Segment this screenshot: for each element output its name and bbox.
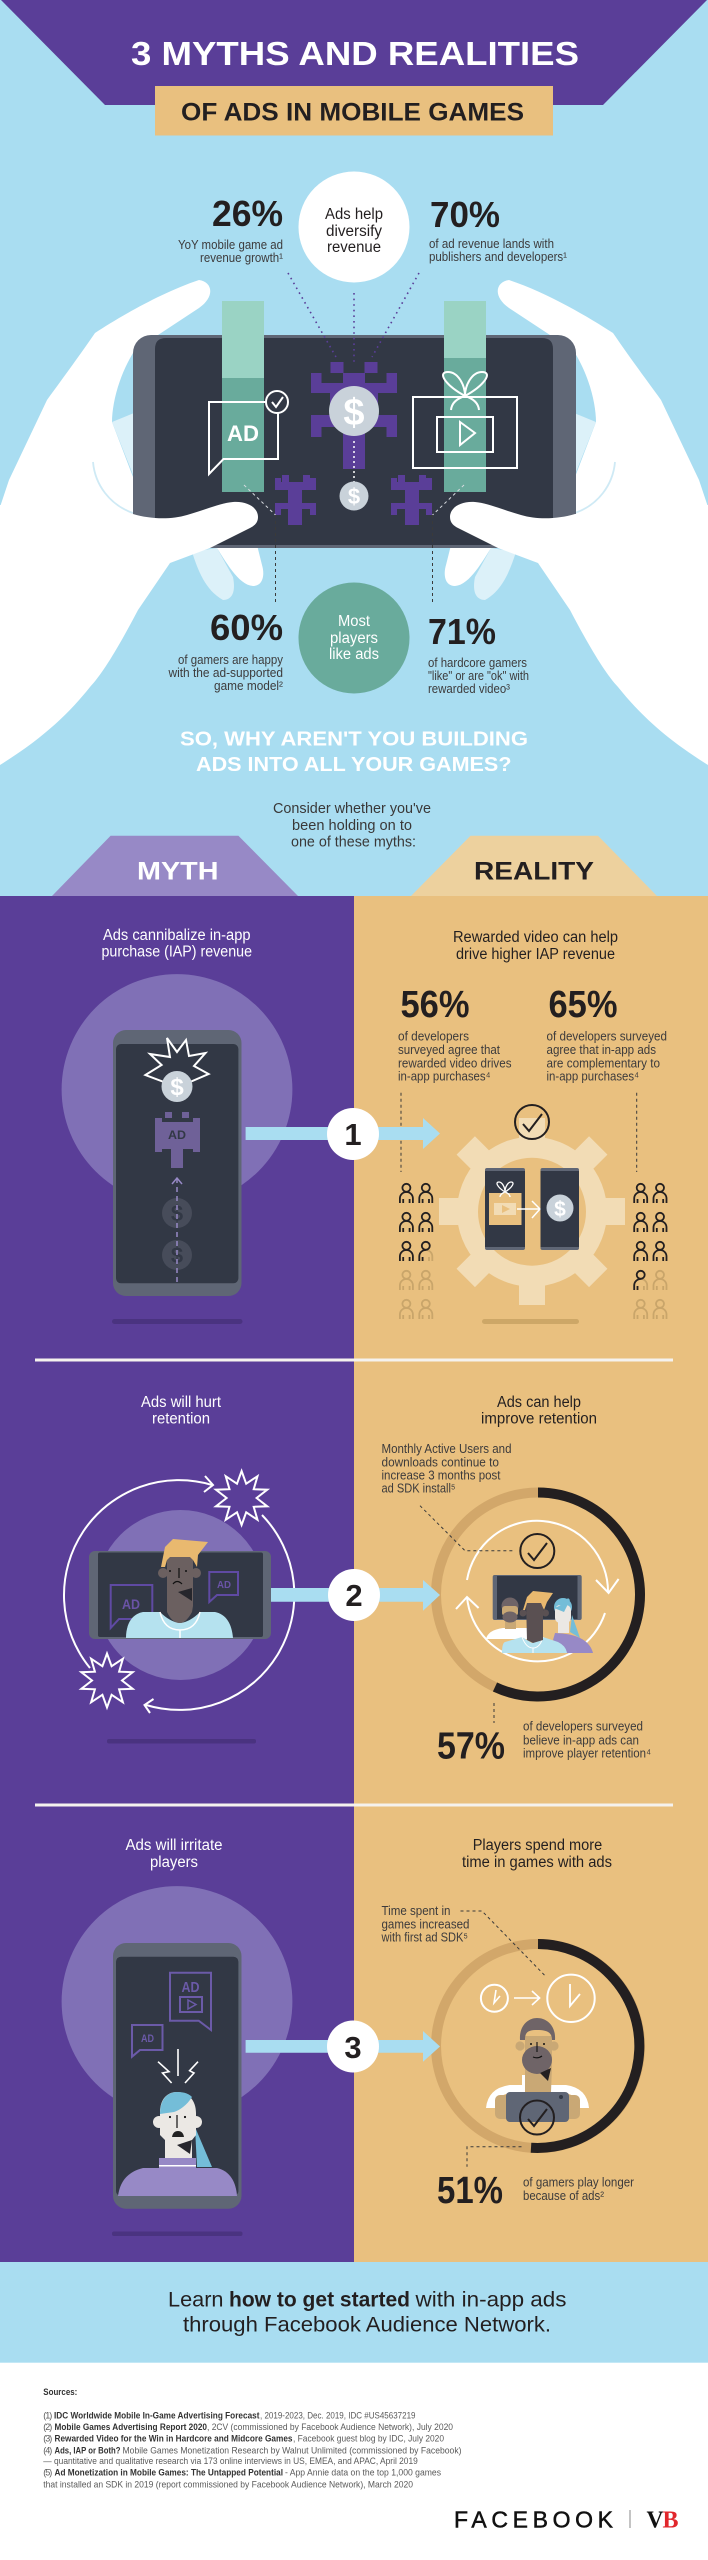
reality 2 heading: Ads can help	[497, 1394, 581, 1411]
callout: ads help diversify revenue: revenue	[327, 239, 381, 256]
woman figure	[118, 2092, 237, 2196]
gear illustration	[439, 1105, 625, 1305]
question heading: ADS INTO ALL YOUR GAMES?	[196, 754, 512, 776]
left hand	[0, 280, 263, 600]
ring chart: 51%	[436, 1944, 640, 2148]
sources: , 2CV (commissioned by Facebook Audience Network), July 2020	[207, 2422, 453, 2432]
reality 1 heading	[453, 929, 618, 963]
video ad bubble	[170, 1973, 211, 2030]
dashed connectors	[244, 485, 464, 605]
stat: 65%: 65%	[548, 984, 618, 1026]
sources: Mobile Games Monetization Research by Walnut Unlimited (commissioned by Facebook)	[122, 2445, 462, 2455]
sources: (4)	[43, 2445, 52, 2455]
ad bubble right: AD	[217, 1580, 231, 1591]
stat: 51%	[437, 2170, 634, 2212]
stat: 26%: YoY mobile game ad	[178, 238, 283, 252]
call to action: through Facebook Audience Network.	[183, 2314, 551, 2337]
stat: 51%: 51%	[437, 2170, 503, 2212]
sources: Ads, IAP or Both?	[54, 2445, 120, 2455]
gear shadow	[482, 1319, 579, 1324]
callout: ads help diversify revenue	[298, 172, 410, 282]
myth 3 heading	[126, 1837, 222, 1871]
dashed leader 57	[493, 1703, 495, 1723]
sources: , Facebook guest blog by IDC, July 2020	[293, 2434, 444, 2444]
invader with coin: $	[343, 392, 365, 434]
phone body	[133, 335, 576, 548]
stat: 65%: are complementary to	[546, 1056, 660, 1070]
stat: 56%: 56%	[400, 984, 470, 1026]
question heading	[180, 728, 528, 776]
myth 1 heading: purchase (IAP) revenue	[102, 944, 252, 961]
center player	[502, 1591, 567, 1653]
logo: vb: V	[646, 2507, 664, 2533]
stat: 57%: of developers surveyed	[523, 1720, 643, 1734]
sources: Rewarded Video for the Win in Hardcore and Midcore Games	[54, 2434, 292, 2444]
note: monthly active users	[382, 1442, 512, 1496]
stat: 60%: with the ad-supported	[168, 666, 283, 680]
call to action: how to get started	[229, 2289, 410, 2312]
reality 3 heading: time in games with ads	[462, 1854, 612, 1871]
small ad bubble	[132, 2025, 162, 2057]
stat: 26%	[178, 193, 283, 265]
stat: 71%: rewarded video³	[428, 682, 510, 696]
callout: ads help diversify revenue: diversify	[326, 223, 382, 240]
left player	[486, 1598, 527, 1639]
sources: Ad Monetization in Mobile Games: The Untapped Potential	[54, 2468, 283, 2478]
header banner	[1, 0, 707, 105]
divider	[35, 1804, 673, 1806]
note: time spent: with first ad SDK⁵	[381, 1930, 468, 1944]
footer background	[0, 2363, 708, 2560]
man with tablet	[486, 2018, 589, 2134]
myth 1 heading	[102, 927, 252, 961]
right hand	[445, 280, 708, 600]
people icons: 65%	[634, 1184, 666, 1319]
stat: 65%	[546, 984, 667, 1084]
icon: check	[520, 1534, 554, 1568]
reality 3 heading	[462, 1837, 612, 1871]
ad bubble left	[111, 1585, 152, 1628]
intro text	[273, 800, 431, 850]
myth 2 heading: retention	[152, 1411, 210, 1428]
callout: most players like ads: Most	[338, 613, 371, 630]
dotted leader	[460, 1911, 546, 1977]
ad bubble right	[209, 1572, 238, 1602]
stat: 71%: "like" or are "ok" with	[428, 669, 529, 683]
people icons: 56%	[400, 1184, 432, 1319]
note: monthly active users: downloads continue to	[382, 1456, 499, 1470]
logo: vb: B	[662, 2507, 678, 2533]
stat: 57%	[437, 1720, 651, 1768]
myth 2 heading: Ads will hurt	[141, 1394, 222, 1411]
myth 1 heading: Ads cannibalize in-app	[103, 927, 250, 944]
note: monthly active users: Monthly Active Users and	[382, 1442, 512, 1456]
intro text: Consider whether you've	[273, 800, 431, 817]
front thumb left	[0, 502, 258, 765]
callout: most players like ads	[298, 582, 410, 694]
dotted leader	[420, 1506, 515, 1551]
title: 3 MYTHS AND REALITIES	[131, 35, 579, 72]
ghost coins: $	[171, 1243, 183, 1268]
small coin: $	[348, 484, 360, 509]
dashed leader lines	[401, 1093, 637, 1172]
stat: 70%: of ad revenue lands with	[429, 237, 554, 251]
sources: — quantitative and qualitative research via 173 online interviews in US, EMEA, and APAC, April 2019	[43, 2456, 418, 2466]
tab: myth: MYTH	[137, 857, 218, 885]
stat: 26%: revenue growth¹	[200, 251, 283, 265]
myth 2 heading	[141, 1394, 222, 1428]
arrow 3: 3	[344, 2030, 362, 2065]
call to action: Learn	[168, 2289, 224, 2312]
arrow: looping top	[64, 1476, 213, 1668]
reality 3 heading: Players spend more	[473, 1837, 602, 1854]
stat: 65%: of developers surveyed	[546, 1030, 667, 1044]
icon: ad invader	[155, 1112, 200, 1168]
stat: 56%: surveyed agree that	[398, 1043, 500, 1057]
myth 2 illustration: man frustrated by ads	[64, 1471, 294, 1713]
panel: myth column	[0, 896, 354, 2262]
stat: 71%: of hardcore gamers	[428, 656, 527, 670]
intro text: been holding on to	[292, 817, 412, 834]
stat: 51%: of gamers play longer	[523, 2176, 634, 2190]
logo: vb	[646, 2507, 678, 2533]
dashed arrow up	[172, 1178, 182, 1282]
stat: 71%	[428, 611, 529, 696]
invader with coin	[311, 362, 397, 490]
sources: that installed an SDK in 2019 (report commissioned by Facebook Audience Network), March 2020	[43, 2479, 413, 2489]
front thumb right	[450, 502, 708, 765]
call to action	[168, 2289, 566, 2337]
myth 1 illustration: phone with invader	[62, 974, 292, 1296]
note: time spent: Time spent in	[382, 1904, 451, 1918]
stat: 56%: in-app purchases⁴	[398, 1070, 490, 1084]
sources: (5)	[43, 2468, 52, 2478]
shadow 3	[112, 2232, 242, 2236]
arrow between phones	[517, 1201, 540, 1218]
arrow 2	[271, 1569, 440, 1621]
icon: clocks with arrow	[481, 1975, 595, 2022]
subtitle banner	[155, 86, 553, 136]
shock lines	[158, 2049, 198, 2083]
panel: reality column	[354, 896, 708, 2262]
reality 1 heading: Rewarded video can help	[453, 929, 618, 946]
stat: 60%: game model²	[214, 679, 283, 693]
stat: 60%: of gamers are happy	[178, 653, 284, 667]
arrow 1: 1	[344, 1117, 362, 1152]
stat: 56%: of developers	[398, 1030, 469, 1044]
stat: 65%: agree that in-app ads	[546, 1043, 656, 1057]
players group on screen	[486, 1575, 593, 1653]
logo divider	[630, 2510, 631, 2528]
man figure	[126, 1539, 233, 1638]
retention loop	[456, 1521, 619, 1661]
note: time spent	[381, 1904, 470, 1944]
divider	[35, 1358, 673, 1362]
sources: (1)	[43, 2410, 52, 2420]
small invader right	[391, 475, 432, 525]
myth 3 illustration: irritated player	[62, 1886, 292, 2209]
stat: 70%: publishers and developers¹	[429, 250, 567, 264]
stat: 56%: rewarded video drives	[398, 1056, 512, 1070]
green bar right	[444, 301, 486, 492]
stat: 60%	[168, 607, 284, 693]
illustration: hands holding phone	[0, 273, 708, 765]
small coin	[340, 482, 368, 510]
icon: ad invader: AD	[168, 1128, 186, 1142]
ghost coins: $	[171, 1201, 183, 1226]
sources: - App Annie data on the top 1,000 games	[285, 2468, 441, 2478]
ad bubble left: AD	[122, 1596, 140, 1612]
arrow 1	[246, 1108, 440, 1160]
stat: 51%: because of ads²	[523, 2189, 604, 2203]
tab: myth	[52, 836, 298, 896]
stat: 71%: 71%	[428, 611, 496, 652]
sources: Sources:	[43, 2387, 77, 2397]
icon: burst	[145, 1038, 209, 1082]
phone with coin	[540, 1168, 579, 1250]
callout: ads help diversify revenue: Ads help	[325, 206, 383, 223]
stat: 56%	[398, 984, 512, 1084]
callout: most players like ads: like ads	[329, 646, 379, 663]
icon: coin	[162, 1071, 192, 1102]
icon: check	[515, 1105, 549, 1139]
sources	[43, 2387, 462, 2489]
dotted leader 51	[467, 2147, 522, 2167]
note: monthly active users: ad SDK install⁵	[382, 1482, 456, 1496]
logo: facebook: FACEBOOK	[454, 2506, 614, 2532]
video ad bubble: AD	[182, 1979, 200, 1996]
reality 1 heading: drive higher IAP revenue	[456, 946, 615, 963]
ghost coins	[162, 1198, 192, 1270]
ring chart: 57%	[436, 1492, 640, 1696]
phone with coin: $	[554, 1198, 566, 1221]
sources: (3)	[43, 2434, 52, 2444]
shadow 2	[107, 1739, 256, 1744]
subtitle banner: OF ADS IN MOBILE GAMES	[181, 98, 524, 126]
icon: burst bottom	[81, 1654, 133, 1708]
right player	[553, 1598, 593, 1653]
arrow: looping bottom	[144, 1515, 294, 1713]
phone with video ad	[485, 1168, 525, 1250]
stat: 70%	[429, 194, 567, 264]
sources: Mobile Games Advertising Report 2020	[54, 2422, 207, 2432]
stat: 26%: 26%	[212, 193, 283, 234]
small ad bubble: AD	[141, 2033, 154, 2045]
sources: , 2019-2023, Dec. 2019, IDC #US45637219	[260, 2410, 416, 2420]
myth 3 heading: players	[150, 1854, 198, 1871]
icon: gift video	[413, 372, 517, 468]
call to action: with in-app ads	[414, 2289, 566, 2312]
phone landscape	[89, 1551, 271, 1639]
phone screen	[155, 338, 553, 545]
icon: ad bubble	[209, 391, 288, 474]
arrow 3	[246, 2020, 440, 2072]
myth 3 heading: Ads will irritate	[126, 1837, 222, 1854]
icon: coin: $	[170, 1074, 184, 1101]
callout: most players like ads: players	[330, 630, 378, 647]
icon: burst top	[216, 1471, 267, 1525]
question heading: SO, WHY AREN'T YOU BUILDING	[180, 728, 528, 750]
sources: IDC Worldwide Mobile In-Game Advertising Forecast	[54, 2410, 260, 2420]
sources: (2)	[43, 2422, 52, 2432]
stat: 70%: 70%	[430, 194, 500, 235]
reality 2 heading	[481, 1394, 597, 1428]
tab: reality: REALITY	[474, 857, 594, 885]
dotted connectors	[288, 273, 419, 362]
stat: 65%: in-app purchases⁴	[546, 1070, 639, 1084]
note: time spent: games increased	[382, 1917, 470, 1931]
intro text: one of these myths:	[291, 834, 416, 850]
reality 2 heading: improve retention	[481, 1411, 597, 1428]
note: monthly active users: increase 3 months post	[382, 1469, 501, 1483]
stat: 57%: improve player retention⁴	[523, 1747, 651, 1761]
stat: 60%: 60%	[210, 607, 283, 648]
small invader left	[275, 475, 316, 525]
arrow 2: 2	[345, 1578, 363, 1613]
stat: 57%: 57%	[437, 1726, 505, 1768]
icon: ad bubble: AD	[227, 421, 259, 446]
stat: 57%: believe in-app ads can	[523, 1733, 639, 1747]
green bar left	[222, 301, 264, 492]
phone shadow 1	[112, 1319, 242, 1324]
tab: reality	[411, 836, 657, 896]
